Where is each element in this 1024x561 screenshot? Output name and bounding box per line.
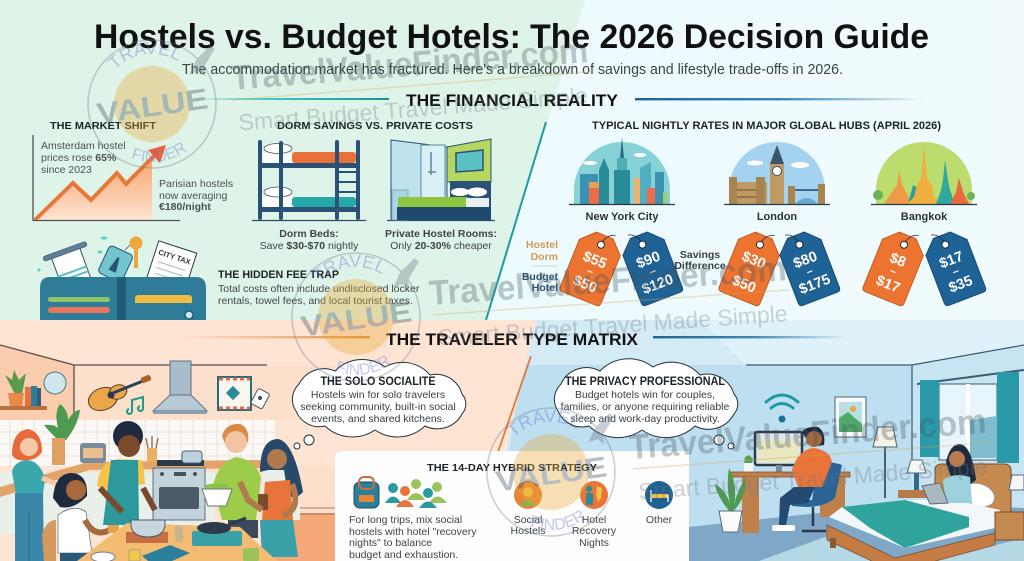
price tag: Bangkok hostel: $17 <box>874 273 902 297</box>
diagonal teal divider <box>486 122 546 320</box>
counter <box>0 460 262 497</box>
thought bubble: the solo socialite <box>292 359 466 449</box>
thought bubble: the solo socialite: THE SOLO SOCIALITE <box>320 374 436 388</box>
orange lower wall <box>270 513 335 561</box>
woman with red hair <box>12 429 58 561</box>
price tag: London hotel <box>774 224 841 307</box>
price tag: Bangkok hotel <box>920 224 987 307</box>
watermark stamp: top left: VALUE <box>95 83 210 131</box>
man in green tee <box>213 424 261 538</box>
text: Amsterdam prices: since 2023 <box>41 164 92 176</box>
desk with computer <box>730 432 850 533</box>
label: Bangkok: Bangkok <box>901 211 948 223</box>
heading: hybrid strategy: THE 14-DAY HYBRID STRATEGY <box>427 462 597 474</box>
text: long-trip advice: For long trips, mix social <box>349 514 462 526</box>
price tag: Bangkok hostel: – <box>888 265 898 278</box>
woman on bed with laptop <box>922 444 976 504</box>
text: long-trip advice: budget and exhaustion. <box>349 549 458 561</box>
watermark text: bottom: TravelValueFinder.com <box>628 402 988 467</box>
label: social hostels: Social <box>514 514 542 526</box>
icon: range hood <box>153 361 207 414</box>
icon: London skyline <box>724 142 830 204</box>
line chart: rising hostel prices <box>33 135 180 220</box>
panel: the 14-day hybrid strategy <box>335 451 689 561</box>
background: top right panel <box>0 0 1024 322</box>
heading: hidden fee trap: THE HIDDEN FEE TRAP <box>218 269 339 281</box>
text: dorm beds: Dorm Beds: <box>279 228 339 240</box>
watermark text: top left <box>230 31 593 136</box>
icon: wallet with fees <box>37 236 206 322</box>
man at desk <box>772 427 832 531</box>
salad bowl <box>202 484 232 506</box>
watermark stamp: top left <box>87 39 217 169</box>
bedside lamp and nightstand <box>898 460 934 498</box>
wall below counter <box>85 466 335 512</box>
watermark text: center: TravelValueFinder.com <box>428 249 788 313</box>
panel: the market shift <box>33 120 233 220</box>
watermark text: bottom <box>628 402 992 505</box>
text: long-trip advice: hostels with hotel "recovery <box>349 526 477 538</box>
text: private rooms: Private Hostel Rooms: <box>385 228 497 240</box>
tile backsplash <box>0 420 275 466</box>
watermark text: center <box>428 249 792 351</box>
icon: New York skyline <box>569 137 675 204</box>
floor <box>689 503 1024 561</box>
watermark stamp: top left: FINDER <box>132 142 187 162</box>
price tag: New York hotel <box>617 224 684 307</box>
price tag: London hotel: $80 <box>791 249 820 272</box>
background: bottom right blue panel <box>0 320 1024 561</box>
shelf with plant and books <box>0 370 66 410</box>
price tag: London hotel: $175 <box>797 271 833 298</box>
watermark stamp: center <box>291 252 421 382</box>
price tag: New York hostel: – <box>585 265 595 278</box>
watermark text: bottom: Smart Budget Travel Made Simple <box>637 453 988 504</box>
background: back wall blue <box>500 365 912 527</box>
thought bubble: the privacy professional <box>554 359 738 449</box>
price tag: New York hotel: $90 <box>634 249 663 272</box>
price tag: London hostel <box>718 224 786 307</box>
icon: music notes <box>127 397 143 414</box>
side wall <box>912 345 1024 510</box>
thought bubble: the solo socialite: seeking community, built-in social <box>300 401 456 413</box>
price tag: New York hostel: $55 <box>580 249 609 272</box>
legend: hostel dorm / budget hotel: Budget <box>522 271 558 283</box>
price tag: New York hostel: $50 <box>571 273 599 297</box>
thought bubble: the privacy professional: Budget hotels win for couples, <box>575 389 715 401</box>
icon: wallet with fees: CITY TAX <box>157 248 192 267</box>
watermark text: center: Smart Budget Travel Made Simple <box>437 300 788 350</box>
bed <box>827 464 1011 561</box>
oven <box>153 468 205 520</box>
wall picture <box>835 397 866 437</box>
watermark stamp: bottom: FINDER <box>531 510 586 530</box>
panel: dorm savings vs private costs <box>252 120 497 252</box>
ceiling <box>700 320 1024 365</box>
price tag: Bangkok hotel: $17 <box>937 249 966 272</box>
woman with long hair <box>240 439 303 557</box>
legend: hostel dorm / budget hotel: Dorm <box>531 251 558 263</box>
text: Paris average: now averaging <box>159 190 227 202</box>
potted plant <box>715 468 746 532</box>
text: long-trip advice: nights" to balance <box>349 537 432 549</box>
window with curtains <box>917 370 1024 463</box>
cabinets <box>0 472 215 534</box>
label: New York City: New York City <box>586 211 659 223</box>
table with pots and games <box>77 518 277 561</box>
office chair <box>792 463 842 531</box>
right nightstand with lamp <box>995 475 1024 540</box>
price tag: New York hotel: $120 <box>640 271 676 298</box>
watermark stamp: bottom: TRAVEL <box>506 410 578 435</box>
price tag: London hostel: $50 <box>730 273 758 297</box>
text: hidden fee description: rentals, towel fees, and local tourist taxes. <box>218 295 413 307</box>
icon: social hostels <box>514 481 542 509</box>
thought bubble: the privacy professional: families, or anyone requiring reliable <box>561 401 729 413</box>
section heading: traveler type matrix: THE TRAVELER TYPE MATRIX <box>386 331 638 349</box>
rug <box>759 537 1024 561</box>
price tag: Bangkok hostel: $8 <box>887 250 908 271</box>
label: other: Other <box>646 514 673 526</box>
text: Amsterdam prices: Amsterdam hostel <box>41 140 126 152</box>
label: hotel recovery nights: Nights <box>579 537 609 549</box>
floor lamp <box>873 427 897 498</box>
price tag: London hotel: – <box>805 265 815 278</box>
seated woman <box>42 473 119 561</box>
text: Amsterdam prices: prices rose 65% <box>41 152 116 164</box>
icon: bunk bed <box>252 140 366 220</box>
counter plant and appliances <box>44 404 204 466</box>
price tag: New York hotel: – <box>648 265 658 278</box>
diagonal orange divider <box>498 356 531 452</box>
text: hidden fee description: Total costs often include undisclosed locker <box>218 283 420 295</box>
price tag: London hostel: – <box>744 265 754 278</box>
text: Paris average: Parisian hostels <box>159 178 233 190</box>
subtitle: The accommodation market has fractured. Here's a breakdown of savings and lifestyle trade-offs in 2026. <box>182 61 843 78</box>
icon: other <box>645 481 673 509</box>
text: Paris average: €180/night <box>159 201 211 213</box>
thought bubble: the privacy professional: THE PRIVACY PROFESSIONAL <box>565 374 725 388</box>
scene: hotel bedroom <box>689 320 1024 561</box>
panel: typical nightly rates <box>522 120 987 307</box>
legend: hostel dorm / budget hotel: Hostel <box>526 239 558 251</box>
price tag: Bangkok hotel: – <box>951 265 961 278</box>
price tag: Bangkok hotel: $35 <box>947 273 975 297</box>
scene: hostel kitchen <box>0 345 335 561</box>
icon: guitar <box>85 374 152 414</box>
watermark stamp: top left: TRAVEL <box>107 42 178 67</box>
heading: market shift: THE MARKET SHIFT <box>50 120 157 132</box>
icon: wifi <box>766 395 798 421</box>
thought bubble: the solo socialite: Hostels win for solo travelers <box>311 389 445 401</box>
legend: hostel dorm / budget hotel: Hotel <box>532 282 558 294</box>
label: savings difference: Savings <box>680 249 720 261</box>
price tag: London hostel: $30 <box>739 249 768 272</box>
icon: private room <box>387 139 495 220</box>
thought bubble: the solo socialite: events, and shared kitchens. <box>311 413 445 425</box>
background: top left mint panel <box>0 0 585 322</box>
text: dorm beds: Save $30-$70 nightly <box>260 240 358 252</box>
watermark stamp: bottom <box>486 407 616 537</box>
icon: group of travelers <box>385 479 447 508</box>
man in apron <box>97 421 155 525</box>
icon: Bangkok skyline <box>871 142 977 204</box>
background: bottom left peach panel <box>0 320 536 561</box>
price tag: Bangkok hostel <box>862 224 930 307</box>
watermark text: top left: Smart Budget Travel Made Simple <box>238 82 589 136</box>
watermark stamp: bottom: VALUE <box>494 451 609 499</box>
icon: hotel recovery nights <box>580 481 608 509</box>
label: London: London <box>757 211 797 223</box>
price tag: New York hostel <box>559 224 627 307</box>
thought bubble: the privacy professional: sleep and work-day productivity. <box>570 413 720 425</box>
heading: nightly rates: TYPICAL NIGHTLY RATES IN MAJOR GLOBAL HUBS (APRIL 2026) <box>592 120 941 132</box>
text: private rooms: Only 20-30% cheaper <box>390 240 492 252</box>
section heading: the financial reality: THE FINANCIAL REALITY <box>406 92 618 110</box>
icon: board game <box>218 377 270 410</box>
watermark stamp: center: TRAVEL <box>311 254 382 280</box>
watermark stamp: center: FINDER <box>336 356 391 375</box>
title: Hostels vs. Budget Hotels: The 2026 Decision Guide <box>94 18 929 56</box>
icon: backpack <box>354 477 379 508</box>
watermark text: top left: TravelValueFinder.com <box>230 31 590 98</box>
panel: the hidden fee trap <box>37 236 420 322</box>
label: hotel recovery nights: Recovery <box>572 525 617 537</box>
label: hotel recovery nights: Hotel <box>582 514 606 526</box>
label: savings difference: Difference <box>674 260 726 272</box>
label: social hostels: Hostels <box>510 525 546 537</box>
heading: dorm savings: DORM SAVINGS VS. PRIVATE COSTS <box>277 120 473 132</box>
watermark stamp: center: VALUE <box>299 296 414 344</box>
legend: hostel dorm / budget hotel <box>522 239 558 294</box>
